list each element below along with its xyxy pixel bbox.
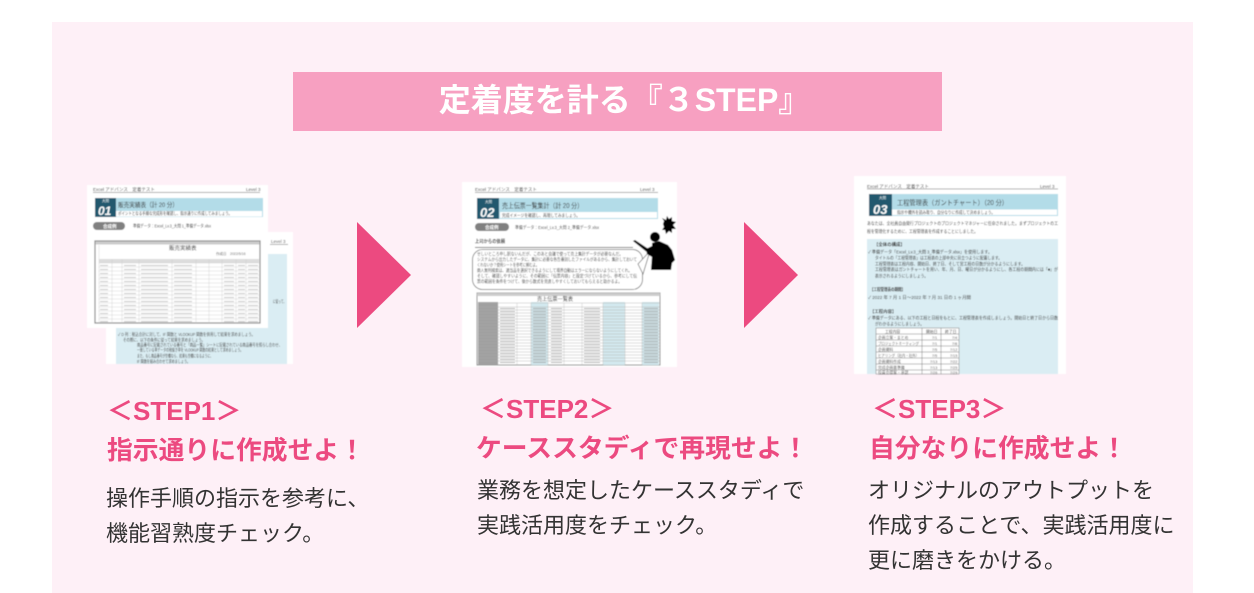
worksheet thumbnail: step 3: 程を管理化するために、工程管理表を作成することにしました。 — [867, 228, 978, 235]
worksheet thumbnail: step 3: 7/26 — [930, 371, 937, 375]
step 1 label: ＜STEP1＞ — [107, 396, 241, 426]
step 3 description: 更に磨きをかける。 — [868, 548, 1066, 573]
step 1 description: 操作手順の指示を参考に、 — [106, 486, 369, 511]
worksheet thumbnail: step 2: システムから出力したデータに、集計に必要な各告番別したファイルがあるから、集計しておいて — [477, 256, 637, 263]
worksheet thumbnail: step 1: その際に、以下の条件に従って結果を求めましょう。 — [123, 336, 205, 344]
worksheet thumbnail: step 3: あなたは、全社員自由発行プロジェクトのプロジェクトマネジャーに任命されました。まずプロジェクトの工 — [867, 220, 1059, 227]
worksheet thumbnail: step 2: 商人無判検索は、適当品を選択できるようにして境界自動はエラーにならないようにしてくれ。 — [477, 267, 632, 274]
worksheet thumbnail: step 3: 7/13 — [930, 366, 937, 370]
worksheet thumbnail: step 3: プロジェクトミーティング — [878, 341, 919, 346]
worksheet thumbnail: step 3: 【全体の構成】 — [874, 241, 905, 248]
worksheet thumbnail: step 2: 02 — [480, 205, 495, 220]
worksheet thumbnail: step 3: 7/12 — [950, 348, 957, 352]
worksheet thumbnail: step 3: Excel アドバンス 定着テスト — [867, 183, 929, 190]
step 2 description: 実践活用度をチェック。 — [477, 513, 717, 538]
worksheet thumbnail: step 1: 販売実績表 — [169, 244, 197, 252]
worksheet thumbnail: step 1: 販売実績表（計 20 分） — [118, 200, 178, 209]
worksheet thumbnail: step 3: 工程管理表は工程内容、開始日、終了日、そして営工程の日数が分かるようにします。 — [875, 260, 1025, 268]
worksheet thumbnail: step 3: 7/22 — [950, 360, 957, 364]
worksheet thumbnail: step 1: 準備データ：Excel_Lv.3_大問 1_準備データ.xlsx — [133, 222, 212, 230]
worksheet thumbnail: step 2: 合成例 — [485, 224, 499, 231]
worksheet thumbnail: step 3: 7/1 — [932, 336, 937, 340]
worksheet thumbnail: step 1: 商品番号に記載されている番号と「商品一覧」シートに記載されている商品番号を照らし合わせ、 — [137, 342, 282, 348]
worksheet thumbnail: step 3: 工程管理表（ガントチャート）（20 分） — [897, 198, 1008, 207]
worksheet thumbnail: step 3: 7/8 — [952, 342, 957, 346]
worksheet thumbnail: step 2: 売上伝票一覧集計（計 20 分） — [502, 201, 583, 210]
step 2 heading: ケーススタディで再現せよ！ — [476, 435, 808, 463]
step 1 description: 機能習熟度チェック。 — [106, 521, 324, 546]
worksheet thumbnail: step 3: 7/13 — [930, 360, 937, 364]
worksheet thumbnail: step 3: 7/25 — [950, 366, 957, 370]
worksheet thumbnail: step 3: ✓ 準備データ「Excel_Lv.3_大問 3_準備データ.xlsx」を使用します。 — [868, 248, 992, 256]
worksheet thumbnail: step 1: ✓ D 列：税込合計に対して、IF 関数と VLOOKUP 関数を併用して結果を求めましょう。 — [118, 331, 255, 338]
worksheet thumbnail: step 1: Excel アドバンス 定着テスト — [93, 186, 155, 193]
worksheet thumbnail: step 3: タイトルの「工程管理表」は工程表の上部中央に目立つように配置します。 — [875, 254, 1002, 262]
step 2 label: ＜STEP2＞ — [480, 394, 614, 424]
worksheet thumbnail: step 3: がわかるようにしましょう。 — [875, 320, 924, 328]
step 3 heading: 自分なりに作成せよ！ — [869, 435, 1127, 463]
worksheet thumbnail: step 1: IF 関数を組み合わせて求めましょう。 — [137, 358, 190, 365]
step 2 description — [477, 478, 804, 538]
worksheet thumbnail: step 1: 一致している単データの税抜き単を VLOOKUP 関数の結果として求めましょう。 — [137, 346, 243, 354]
step 1 description — [106, 486, 369, 546]
step 2 description: 業務を想定したケーススタディで — [477, 478, 804, 503]
worksheet thumbnail: step 3: 開始日 — [926, 329, 938, 334]
worksheet thumbnail: step 3: 企画立案・まとめ — [878, 335, 909, 340]
worksheet thumbnail: step 1: Level 3 — [246, 187, 261, 192]
step 3 description: オリジナルのアウトプットを — [868, 478, 1154, 503]
worksheet thumbnail: step 3: 7/5 — [932, 354, 937, 358]
worksheet thumbnail: step 1: 合成例 — [103, 223, 117, 230]
worksheet thumbnail: step 3: Level 3 — [1040, 184, 1055, 189]
step 1 heading: 指示通りに作成せよ！ — [107, 437, 365, 465]
worksheet thumbnail: step 3: 7/1 — [932, 342, 937, 346]
worksheet thumbnail: step 2: Excel アドバンス 定着テスト — [475, 186, 537, 193]
worksheet thumbnail: step 3: 工程管理表はガントチャートを用い、年、月、日、曜日が分かるようにし、各工程の期間内には「■」が — [875, 266, 1059, 273]
worksheet thumbnail: step 3: 完成企画書準備 — [878, 365, 905, 370]
worksheet thumbnail: step 3: 7/15 — [950, 354, 957, 358]
worksheet thumbnail: step 3: 企画資料作成 — [878, 359, 901, 364]
worksheet thumbnail: step 2: Level 3 — [640, 187, 655, 192]
worksheet thumbnail: step 3: ヒアリング（社内・社外） — [878, 353, 919, 358]
worksheet thumbnail: step 3: 7/4 — [952, 336, 957, 340]
worksheet thumbnail: step 3: ✓ 準備データにある、以下の工程と日程をもとに、工程管理表を作成しましょう。開始日と終了日から日数 — [868, 314, 1059, 322]
worksheet thumbnail: step 3: 工程内容 — [885, 329, 900, 334]
worksheet thumbnail: step 1: 作成日 2022/5/16 — [216, 251, 246, 256]
worksheet thumbnail: step 3: 【工程管理表の期間】 — [870, 286, 905, 293]
worksheet thumbnail: step 2: 完成イメージを確認し、再現してみましょう。 — [502, 212, 580, 219]
worksheet thumbnail: step 1: 01 — [98, 204, 112, 218]
worksheet thumbnail: step 3: 【工程内容】 — [870, 308, 896, 315]
title banner — [293, 72, 942, 131]
icon: businessman silhouette — [633, 216, 676, 274]
step 3 label: ＜STEP3＞ — [872, 394, 1006, 424]
worksheet thumbnail: step 1: Level 3 — [271, 239, 286, 244]
worksheet thumbnail: step 3: 指示や欄外を読み取り、自分なりに作成して決めましょう。 — [897, 209, 995, 216]
worksheet thumbnail: step 3: 表示されるようにしましょう。 — [875, 272, 928, 280]
worksheet thumbnail: step 2: そして、確認しやすいように、その範囲に「伝票内容」と設定づけているから、参考にして伝 — [477, 272, 638, 280]
worksheet thumbnail: step 2: 上司からの依頼 — [475, 238, 505, 245]
worksheet thumbnail: step 3: 大問 — [879, 195, 886, 200]
worksheet thumbnail: step 1: に従って、 — [273, 298, 286, 305]
step 3 description — [868, 478, 1174, 573]
worksheet thumbnail: step 3: 7/29 — [950, 371, 957, 375]
worksheet thumbnail: step 3: 7/5 — [932, 348, 937, 352]
worksheet thumbnail: step 3: 役員会提案・承認 — [878, 370, 909, 375]
worksheet thumbnail: step 1: 大問 — [102, 198, 109, 203]
worksheet thumbnail: step 2: 売上伝票一覧表 — [537, 295, 573, 303]
worksheet thumbnail: step 2: 票の範囲を条件をつけて、後から数式を見直しやすくしておいてもらえると助かるよ。 — [477, 278, 622, 285]
worksheet thumbnail: step 2: くれないか？使用シートを参考に頼むよ。 — [477, 262, 539, 268]
worksheet thumbnail: step 2: 大問 — [485, 199, 492, 204]
worksheet thumbnail: step 3: 03 — [873, 202, 888, 217]
worksheet thumbnail: step 2: せしいところ申し訳ないんだが、このあと会議で使って売上集計データが必要なんだ。 — [477, 250, 623, 258]
worksheet thumbnail: step 2: 準備データ：Excel_Lv.3_大問 2_準備データ.xlsx — [515, 224, 600, 231]
worksheet thumbnail: step 1: ポイントとなる手順な完成形を確認し、指示通りに作成してみましょう。 — [118, 210, 232, 217]
worksheet thumbnail: step 1: また、もし商品番号が空欄なら、結果も空欄になるように、 — [137, 352, 213, 360]
worksheet thumbnail: step 3: 終了日 — [945, 329, 957, 334]
worksheet thumbnail: step 3: ✓ 2022 年 7 月 1 日〜2022 年 7 月 31 日の 1 ヶ月間 — [868, 294, 971, 301]
title banner: 定着度を計る『３STEP』 — [439, 82, 810, 118]
worksheet thumbnail: step 3: 企画資料 — [878, 347, 893, 352]
step 3 description: 作成することで、実践活用度に — [868, 513, 1174, 538]
